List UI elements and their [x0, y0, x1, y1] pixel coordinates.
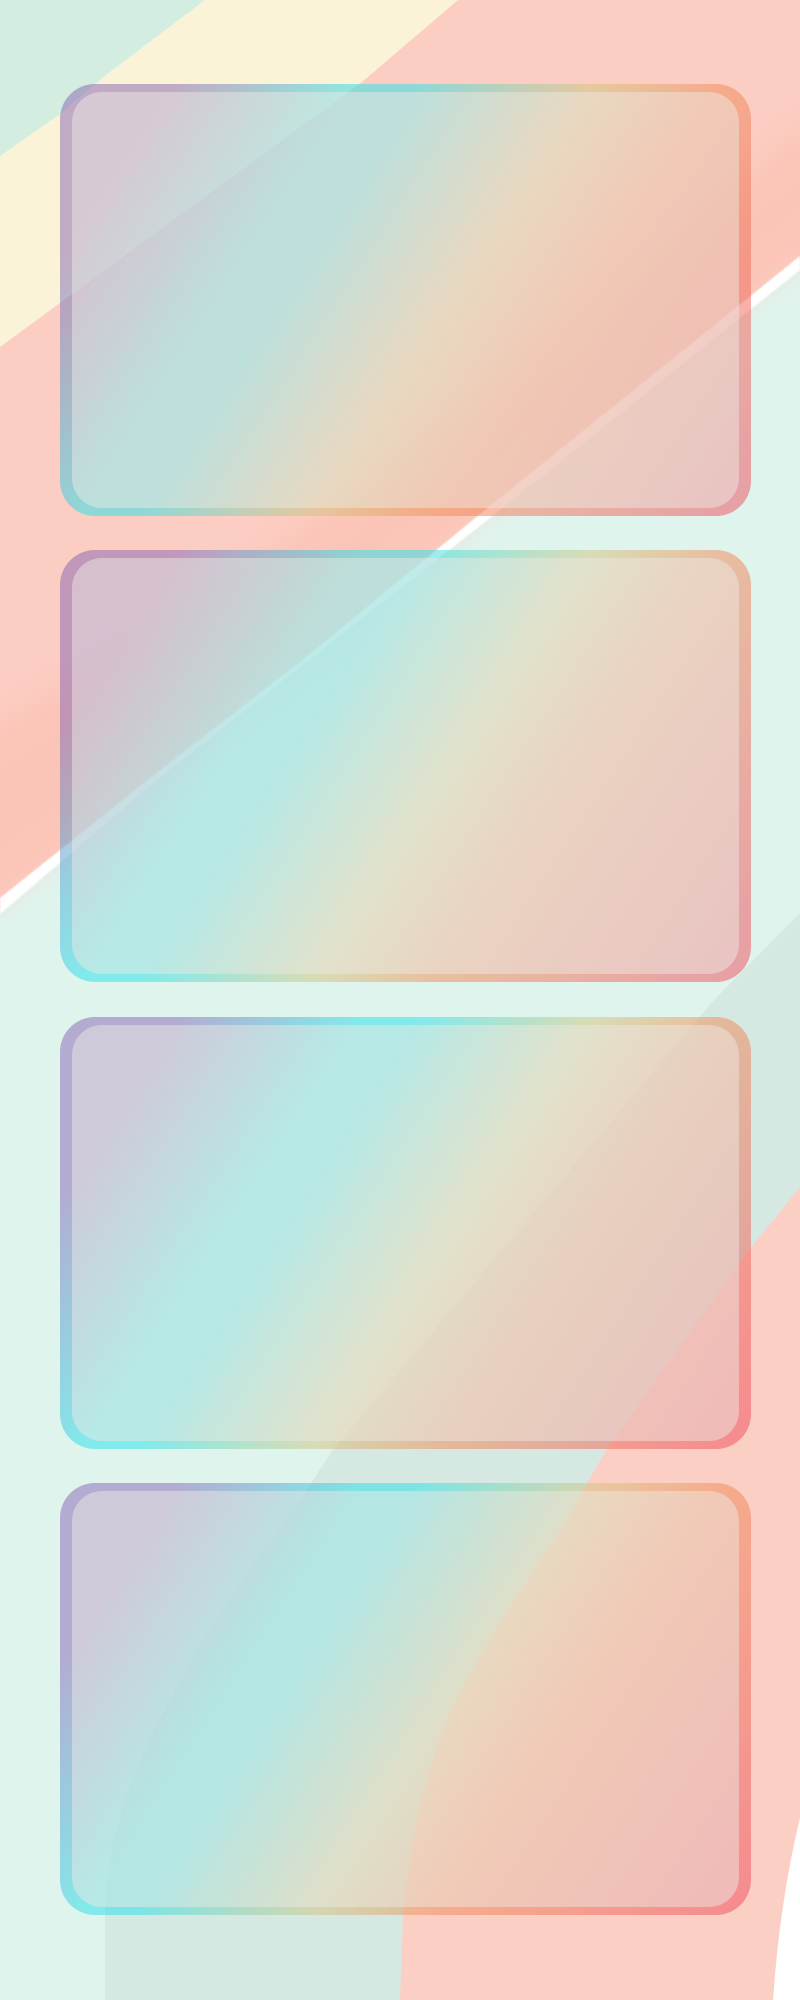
panel 1 inner glass area	[72, 92, 739, 508]
pink diagonal band	[0, 0, 800, 908]
white diagonal streak	[0, 256, 800, 914]
panel 2 inner glass area	[72, 558, 739, 974]
panel 2	[60, 550, 751, 982]
panel 3	[60, 1017, 751, 1449]
white bottom-right sliver	[773, 1818, 800, 2000]
mint corner band	[0, 0, 205, 156]
panel 4 inner glass area	[72, 1491, 739, 1907]
darker pink brush band	[0, 80, 800, 950]
panel 3 inner glass area	[72, 1025, 739, 1441]
panel 1	[60, 84, 751, 516]
pink sweeping shape	[400, 1187, 800, 2000]
grey-mint sweeping shape	[105, 913, 800, 2000]
panel 4	[60, 1483, 751, 1915]
cream diagonal band	[0, 0, 458, 347]
